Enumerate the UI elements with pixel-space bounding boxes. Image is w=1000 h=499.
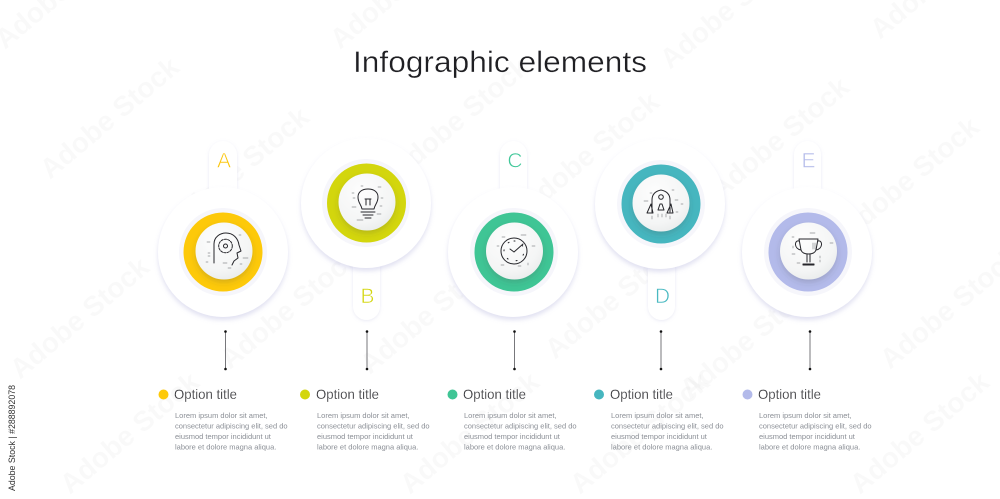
letter E: E — [801, 150, 816, 172]
description E: eiusmod tempor incididunt ut — [759, 432, 856, 441]
step E — [742, 141, 872, 317]
dot C — [448, 390, 458, 400]
outer disc E — [742, 187, 872, 317]
watermark: Adobe Stock — [704, 71, 855, 205]
dot D — [594, 390, 604, 400]
watermark: Adobe Stock — [384, 51, 535, 185]
connector C — [513, 330, 516, 370]
watermark: Adobe Stock — [674, 271, 825, 405]
legend E — [742, 386, 872, 452]
letter B: B — [360, 285, 375, 308]
button A — [196, 222, 252, 280]
ring A — [184, 212, 262, 292]
watermark: Adobe Stock — [834, 111, 985, 245]
description A: Lorem ipsum dolor sit amet, — [175, 411, 268, 420]
watermark: Adobe Stock — [354, 246, 505, 380]
description C: eiusmod tempor incididunt ut — [464, 432, 561, 441]
icon: light bulb — [352, 186, 383, 220]
step B — [301, 138, 431, 320]
description A: eiusmod tempor incididunt ut — [175, 432, 272, 441]
step C — [448, 141, 578, 317]
title: Infographic elements — [353, 46, 647, 79]
button C — [486, 222, 543, 280]
option title E: Option title — [758, 386, 821, 402]
watermark: Adobe Stock — [4, 251, 155, 385]
halo D — [617, 160, 705, 248]
watermark: Adobe Stock — [844, 366, 995, 499]
watermark: Adobe Stock — [214, 241, 365, 375]
watermark: Adobe Stock — [539, 231, 690, 365]
icon: trophy — [792, 233, 833, 265]
description E: Lorem ipsum dolor sit amet, — [759, 411, 852, 420]
button E — [780, 222, 837, 280]
legend D — [594, 386, 724, 452]
halo B — [322, 159, 410, 247]
outer disc D — [595, 139, 725, 269]
outer disc C — [448, 187, 578, 317]
description D: labore et dolore magna aliqua. — [611, 442, 712, 452]
icon: rocket — [644, 190, 683, 219]
watermark: Adobe Stock — [164, 101, 315, 235]
button D — [632, 174, 690, 232]
tab D — [648, 250, 675, 320]
dot B — [300, 390, 310, 400]
letter A: A — [217, 150, 231, 172]
dot A — [158, 390, 168, 400]
description B: labore et dolore magna aliqua. — [317, 442, 418, 452]
watermark: Adobe Stock — [564, 366, 715, 499]
description D: eiusmod tempor incididunt ut — [611, 432, 708, 441]
ring E — [768, 212, 848, 292]
option title A: Option title — [174, 386, 237, 402]
legend B — [300, 386, 430, 452]
icon: head with gear — [206, 233, 248, 268]
description C: Lorem ipsum dolor sit amet, — [464, 411, 557, 420]
halo C — [470, 208, 558, 296]
description A: consectetur adipiscing elit, sed do — [175, 422, 288, 430]
connector D — [660, 330, 662, 370]
ring B — [327, 164, 406, 242]
letter D: D — [655, 285, 670, 308]
button B — [338, 174, 396, 230]
halo A — [179, 208, 267, 296]
connector B — [366, 330, 368, 370]
step D — [595, 139, 725, 320]
description D: Lorem ipsum dolor sit amet, — [611, 411, 704, 420]
letter C: C — [507, 150, 523, 172]
tab B — [353, 250, 380, 320]
tab A — [209, 141, 237, 211]
halo E — [764, 208, 852, 296]
dot E — [742, 390, 752, 400]
description A: labore et dolore magna aliqua. — [175, 442, 276, 452]
description E: labore et dolore magna aliqua. — [759, 442, 860, 452]
description C: consectetur adipiscing elit, sed do — [464, 422, 577, 430]
description C: labore et dolore magna aliqua. — [464, 442, 565, 452]
watermark: Adobe Stock — [514, 86, 665, 220]
description B: consectetur adipiscing elit, sed do — [317, 422, 430, 430]
option title D: Option title — [610, 386, 673, 402]
description D: consectetur adipiscing elit, sed do — [611, 422, 724, 430]
tab C — [500, 141, 527, 211]
option title B: Option title — [316, 386, 379, 402]
option title C: Option title — [463, 386, 526, 402]
ring C — [474, 212, 554, 292]
watermark: Adobe Stock — [34, 51, 185, 185]
connector A — [224, 330, 227, 370]
step A — [158, 141, 288, 317]
connector E — [809, 330, 811, 370]
ring D — [622, 164, 700, 244]
stock image credit: Adobe Stock | #288892078 — [7, 385, 18, 491]
watermark: Adobe Stock — [54, 366, 205, 499]
watermark: Adobe Stock — [394, 366, 545, 499]
icon: clock — [497, 235, 535, 266]
legend C — [448, 386, 577, 452]
description B: eiusmod tempor incididunt ut — [317, 432, 414, 441]
outer disc A — [158, 187, 288, 317]
legend A — [158, 386, 288, 452]
tab E — [794, 141, 821, 211]
description B: Lorem ipsum dolor sit amet, — [317, 411, 410, 420]
outer disc B — [301, 138, 431, 268]
description E: consectetur adipiscing elit, sed do — [759, 422, 872, 430]
